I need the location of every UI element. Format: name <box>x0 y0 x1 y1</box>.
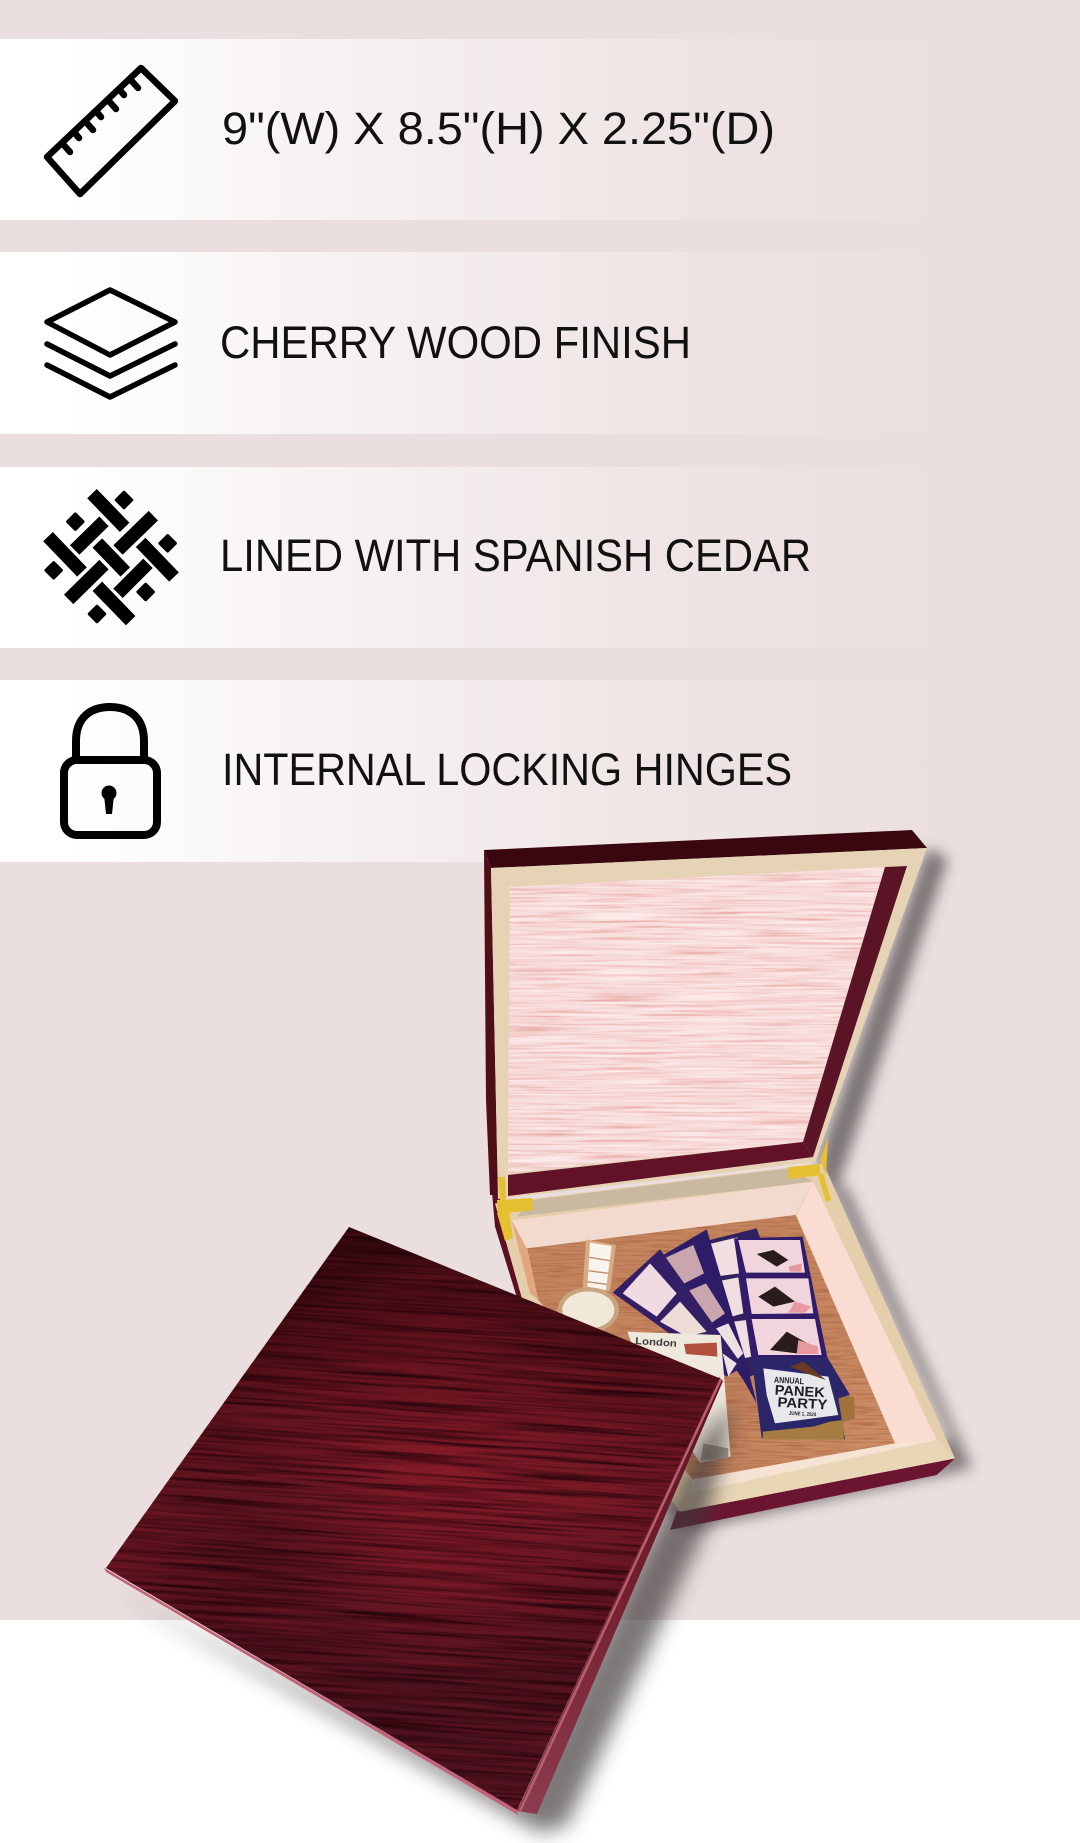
back wall <box>512 1182 813 1248</box>
watch <box>558 1239 619 1333</box>
open box base <box>488 1150 955 1530</box>
dark outer box wall <box>488 1150 523 1300</box>
strip 4 <box>734 1237 827 1360</box>
card text: ANNUAL <box>774 1375 805 1386</box>
lid inner panel <box>508 867 885 1173</box>
strip 3 <box>696 1228 780 1377</box>
card text <box>772 1375 830 1419</box>
card text: JUNE 1, 2024 <box>789 1411 816 1418</box>
text: hinges: INTERNAL LOCKING HINGES <box>222 744 792 795</box>
open box shadows <box>660 848 972 1530</box>
lid outer dark edges <box>484 830 927 868</box>
icon: ruler <box>47 68 175 194</box>
strip 2 <box>658 1229 757 1403</box>
lid top face <box>106 1227 719 1810</box>
icon: padlock <box>64 707 157 835</box>
left wall <box>512 1221 538 1300</box>
closed lid shadow <box>112 1400 735 1832</box>
panel: hinges <box>0 680 960 862</box>
front wall <box>688 1440 943 1493</box>
text: finish: CHERRY WOOD FINISH <box>220 317 691 368</box>
panel: lining <box>0 467 960 648</box>
lid inner bottom band <box>508 1142 813 1196</box>
lid inner right band <box>803 866 907 1157</box>
rim <box>495 1163 955 1512</box>
open box lid <box>484 830 927 1199</box>
text: dimensions: 9"(W) X 8.5"(H) X 2.25"(D) <box>222 103 775 154</box>
lid bottom edge highlight <box>104 1568 518 1815</box>
photo strips fan <box>613 1228 827 1403</box>
brass hinges <box>497 1138 831 1241</box>
right wall <box>797 1182 937 1443</box>
floor <box>527 1213 895 1480</box>
icon: weave <box>44 490 178 624</box>
panel: finish <box>0 252 960 434</box>
strip 1 <box>613 1249 743 1377</box>
lid side <box>517 1377 723 1814</box>
lid frame <box>491 848 927 1199</box>
card text: PANEK <box>774 1382 825 1400</box>
panel: dimensions <box>0 39 960 220</box>
postcard text: London <box>635 1336 677 1350</box>
card text: PARTY <box>777 1394 829 1412</box>
text: lining: LINED WITH SPANISH CEDAR <box>220 530 811 581</box>
closed wooden lid <box>104 1227 723 1815</box>
party card <box>752 1357 855 1439</box>
postcard <box>627 1332 731 1463</box>
icon: layers <box>47 290 175 397</box>
